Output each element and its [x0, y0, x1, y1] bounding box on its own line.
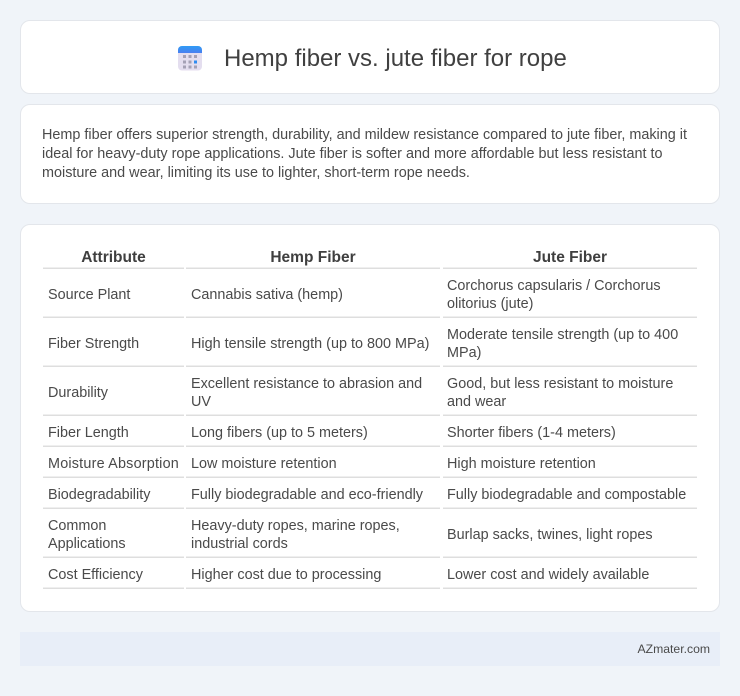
- cell: hemp durability: Excellent resistance to abrasion and: [191, 376, 422, 392]
- cell: hemp applications: [191, 518, 400, 552]
- cell: hemp length: Long fibers (up to 5 meters): [191, 425, 368, 441]
- footer bar: [20, 632, 720, 666]
- row: Common Applications: Common: [48, 518, 106, 534]
- cell: hemp durability: UV: [191, 394, 211, 410]
- cell: jute biodegradability: Fully biodegradable and compostable: [447, 487, 686, 503]
- cell: hemp applications: Heavy-duty ropes, marine ropes,: [191, 518, 400, 534]
- cell: jute cost: Lower cost and widely available: [447, 567, 649, 583]
- footer credit: AZmater.com: [638, 642, 710, 656]
- panel: comparison table card: [20, 224, 720, 612]
- row: Common Applications: Applications: [48, 536, 126, 552]
- summary text: [42, 127, 687, 181]
- row: Common Applications: [48, 518, 126, 552]
- cell: jute source: olitorius (jute): [447, 296, 533, 312]
- summary text: ideal for heavy-duty rope applications. Jute fiber is softer and more affordable but less resistant to: [42, 146, 662, 162]
- cell: hemp cost: Higher cost due to processing: [191, 567, 381, 583]
- cell: hemp biodegradability: Fully biodegradable and eco-friendly: [191, 487, 423, 503]
- summary text: moisture and wear, limiting its use to lighter, short-term rope needs.: [42, 165, 470, 181]
- icon: calendar: [178, 46, 202, 70]
- title: Hemp fiber vs. jute fiber for rope: [224, 45, 567, 72]
- cell: jute strength: Moderate tensile strength (up to 400: [447, 327, 678, 343]
- header: Attribute: Attribute: [81, 249, 146, 266]
- row: Fiber Length: Fiber Length: [48, 425, 129, 441]
- cell: jute strength: MPa): [447, 345, 481, 361]
- cell: jute durability: and wear: [447, 394, 506, 410]
- cell: jute strength: [447, 327, 678, 361]
- row: Durability: Durability: [48, 385, 108, 401]
- panel: title card: [20, 20, 720, 94]
- cell: jute durability: Good, but less resistant to moisture: [447, 376, 673, 392]
- header: Hemp Fiber: Hemp Fiber: [270, 249, 356, 266]
- row: Biodegradability: Biodegradability: [48, 487, 150, 503]
- cell: jute applications: Burlap sacks, twines, light ropes: [447, 527, 653, 543]
- header: Jute Fiber: Jute Fiber: [533, 249, 607, 266]
- cell: hemp durability: [191, 376, 422, 410]
- cell: jute moisture: High moisture retention: [447, 456, 596, 472]
- summary text: Hemp fiber offers superior strength, durability, and mildew resistance compared to jute fiber, making it: [42, 127, 687, 143]
- row: Fiber Strength: Fiber Strength: [48, 336, 139, 352]
- panel: summary card: [20, 104, 720, 204]
- cell: jute durability: [447, 376, 673, 410]
- row: Moisture Absorption: Moisture Absorption: [48, 456, 179, 472]
- cell: hemp applications: industrial cords: [191, 536, 288, 552]
- cell: jute source: Corchorus capsularis / Corchorus: [447, 278, 661, 294]
- row: Source Plant: Source Plant: [48, 287, 130, 303]
- row: Cost Efficiency: Cost Efficiency: [48, 567, 143, 583]
- cell: hemp strength: High tensile strength (up to 800 MPa): [191, 336, 429, 352]
- cell: hemp moisture: Low moisture retention: [191, 456, 337, 472]
- cell: jute length: Shorter fibers (1-4 meters): [447, 425, 616, 441]
- cell: jute source: [447, 278, 661, 312]
- cell: hemp source: Cannabis sativa (hemp): [191, 287, 343, 303]
